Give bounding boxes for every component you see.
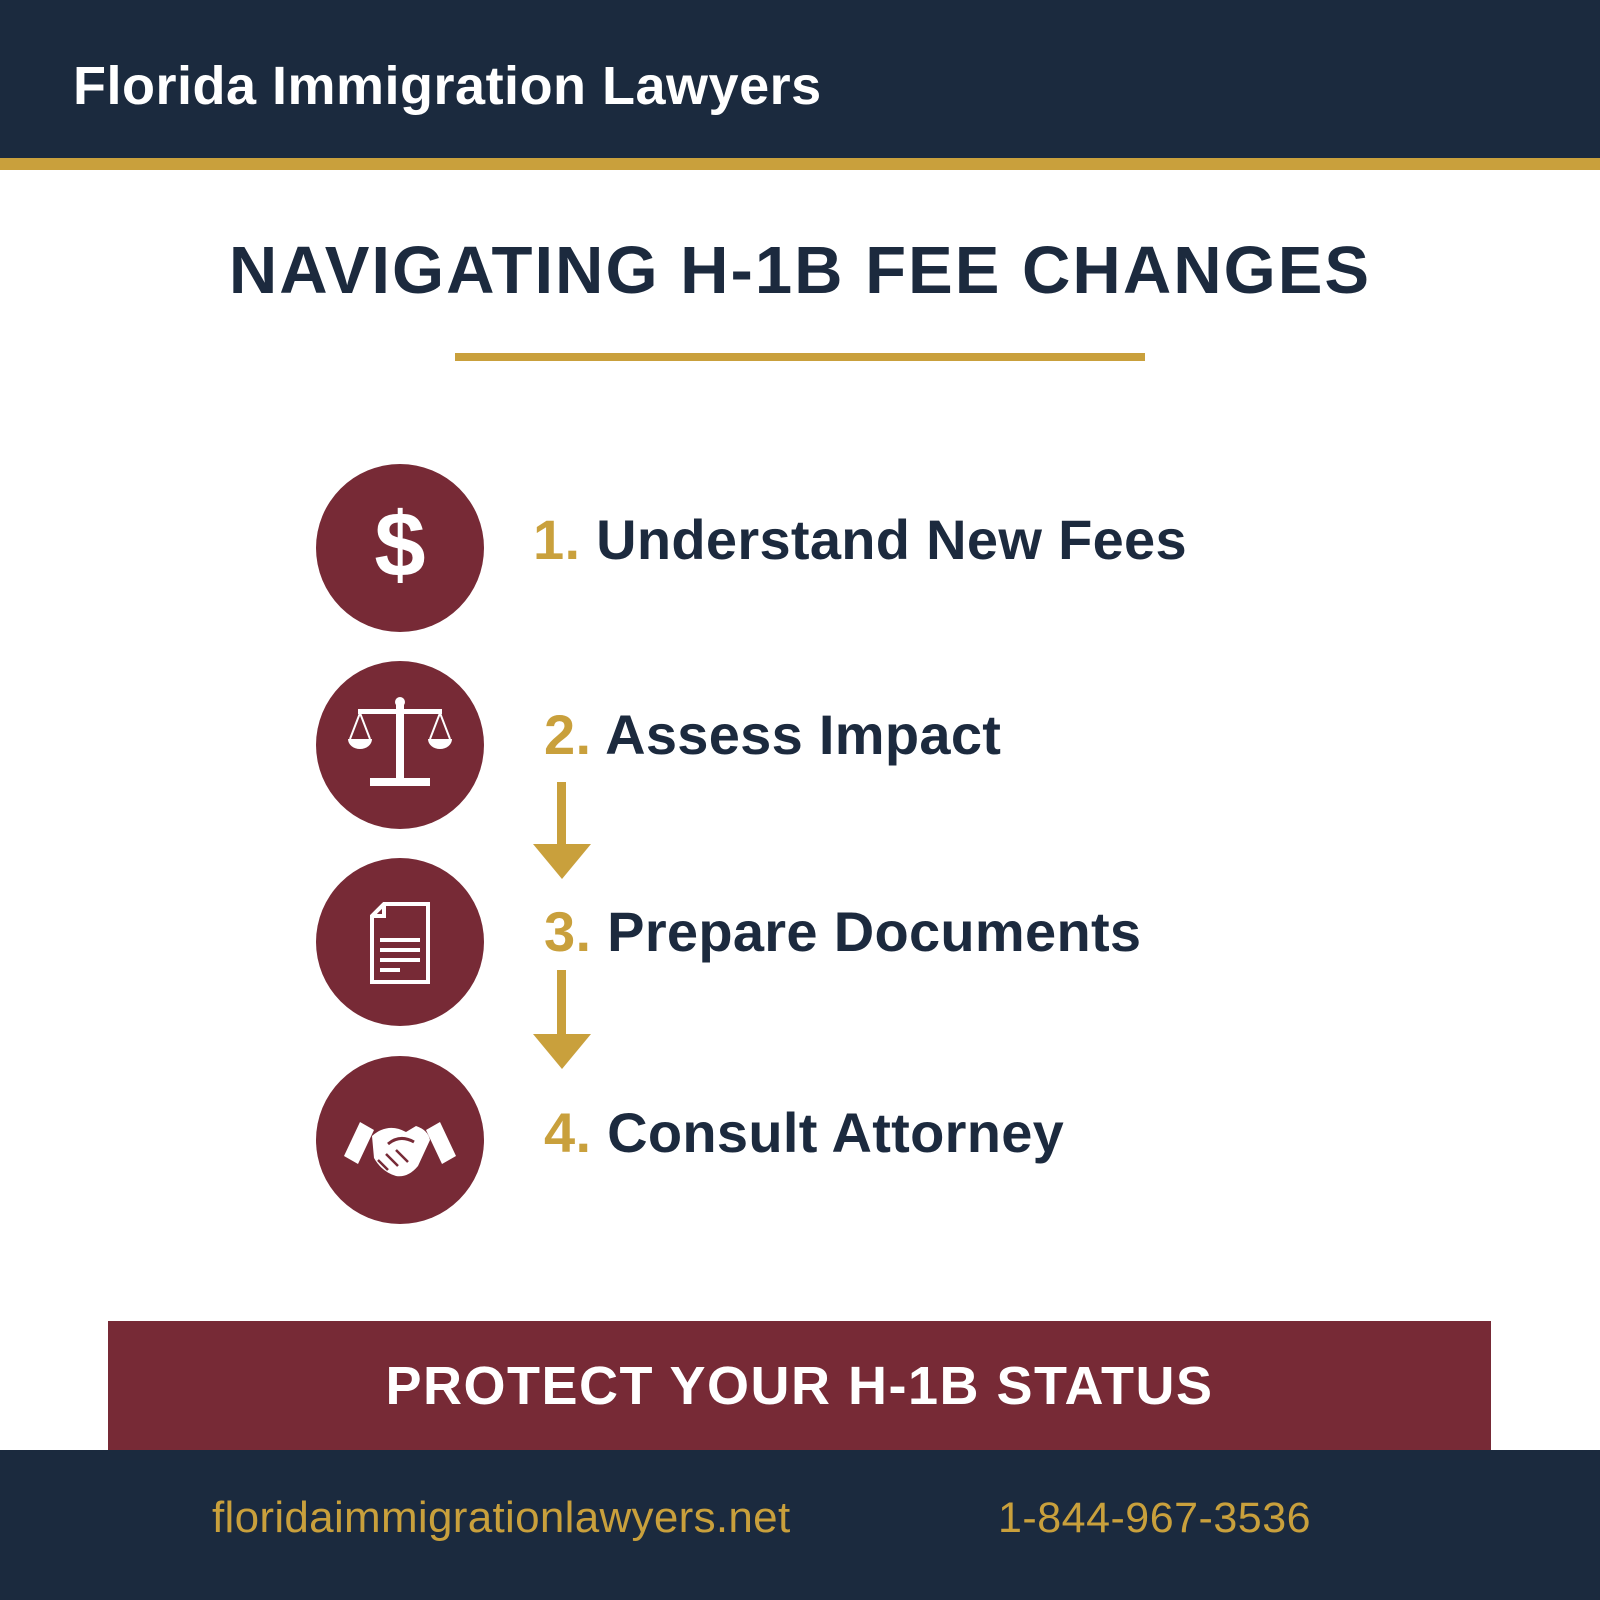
step 3: 3. Prepare Documents [544, 900, 1141, 963]
footer url: floridaimmigrationlawyers.net [212, 1493, 790, 1542]
icon: document [316, 858, 484, 1026]
arrow 3 to 4 [533, 970, 591, 1069]
icon: dollar: $ [374, 494, 426, 596]
icon: scales [316, 661, 484, 829]
banner: PROTECT YOUR H-1B STATUS [385, 1356, 1214, 1416]
step 1: 1. Understand New Fees [533, 508, 1187, 571]
footer [0, 1450, 1600, 1600]
footer phone: 1-844-967-3536 [998, 1494, 1311, 1542]
title: NAVIGATING H-1B FEE CHANGES [229, 233, 1371, 308]
gold stripe [0, 158, 1600, 170]
step 2: 2. Assess Impact [544, 703, 1001, 766]
banner [108, 1321, 1491, 1450]
title underline [455, 353, 1145, 361]
arrow 2 to 3 [533, 782, 591, 879]
icon: dollar [316, 464, 484, 632]
header bar [0, 0, 1600, 158]
header text: Florida Immigration Lawyers [73, 56, 822, 116]
step 4: 4. Consult Attorney [544, 1101, 1064, 1164]
icon: handshake [316, 1056, 484, 1224]
